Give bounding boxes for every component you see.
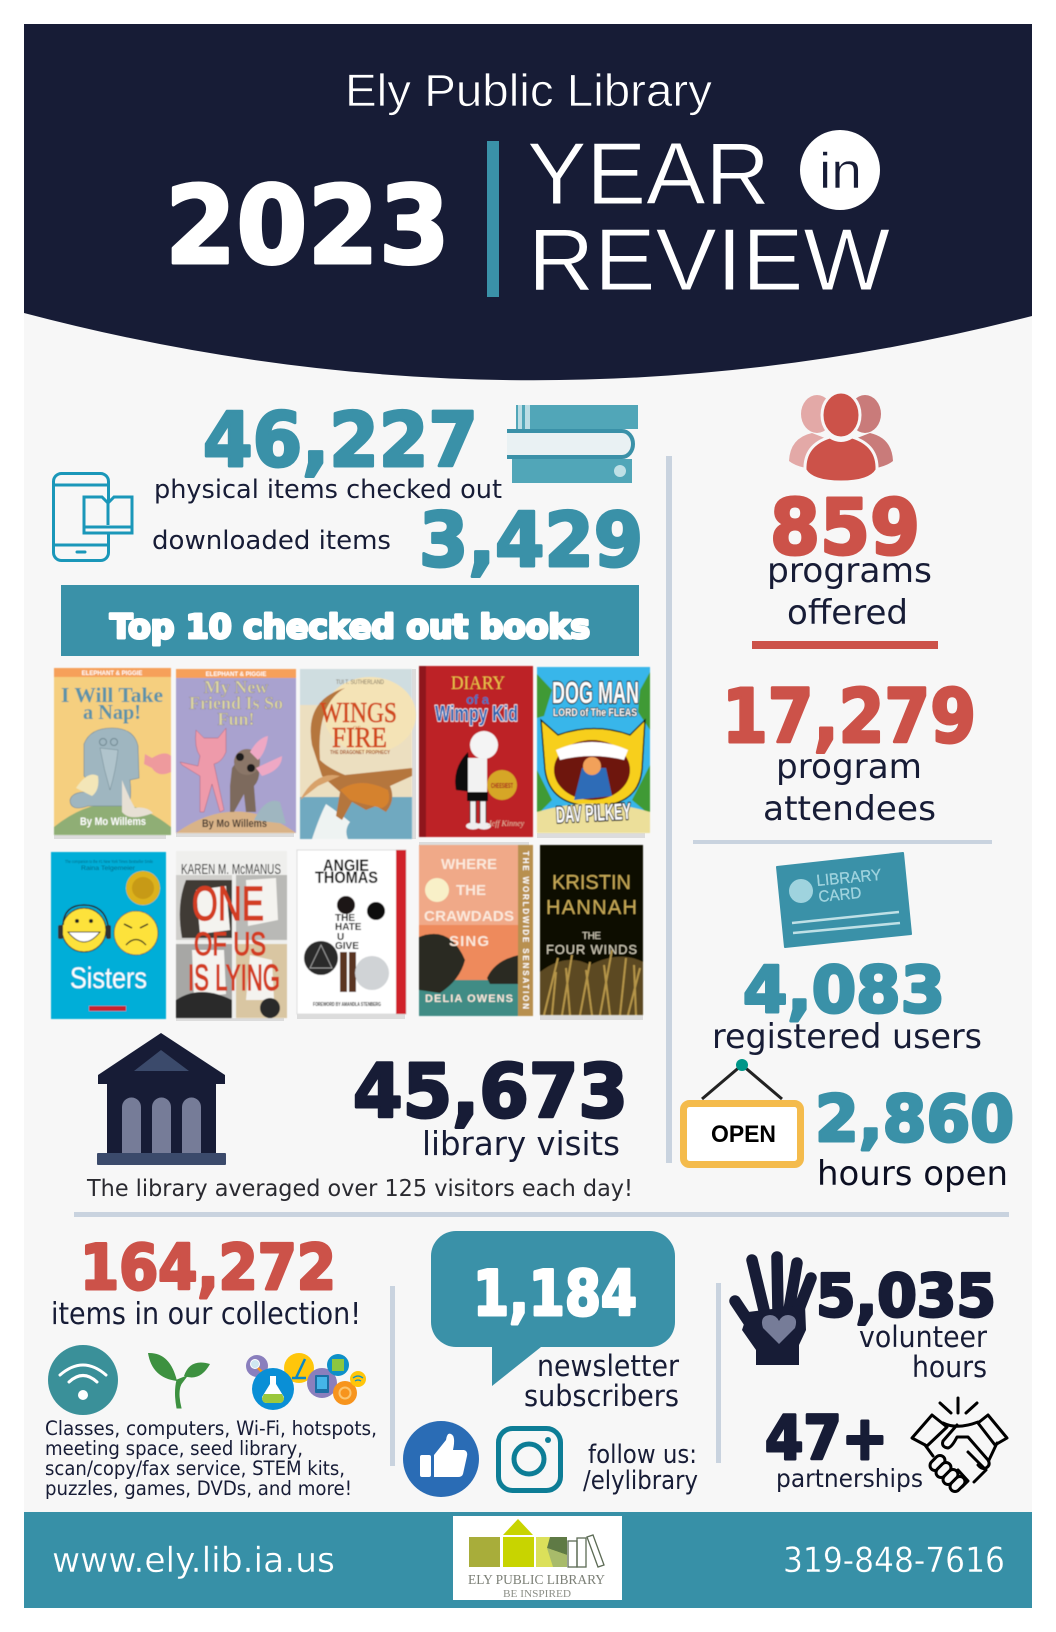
book cover: Where the Crawdads Sing: CRAWDADS [424,908,514,925]
library name: Ely Public Library [345,65,713,116]
book cover: Sisters: Raina Telgemeier [81,866,135,872]
callout: newsletter speech bubble [431,1231,675,1386]
stat: items in collection [51,1231,361,1332]
icon: open sign [684,1059,800,1164]
book cover: The Hate U Give: GIVE [335,941,359,952]
book cover: Sisters [51,852,166,1019]
book cover: The Four Winds: HANNAH [546,897,637,919]
stat: registered users: registered users [712,1017,982,1057]
book cover: I Will Take a Nap [54,668,171,835]
text: daily visitors: The library averaged over 125 visitors each day! [86,1176,633,1202]
icon: open sign: OPEN [711,1121,776,1148]
logo: Ely Public Library: ELY PUBLIC LIBRARY [468,1573,605,1588]
panel: footer band [24,1512,1032,1608]
stat: volunteer hours: hours [912,1350,987,1384]
text: phone number: 319-848-7616 [783,1541,1005,1581]
text: newsletter subscribers: subscribers [524,1379,679,1413]
stat: registered users [712,954,982,1057]
book cover: My New Friend Is So Fun: By Mo Willems [202,818,267,830]
stat: partnerships [765,1403,923,1493]
stat: program attendees: attendees [763,789,936,829]
book cover: The Hate U Give: ANGIE [323,856,369,875]
book cover: The Four Winds [540,845,643,1015]
divider: horizontal section rule [74,1212,1009,1217]
book cover: Diary of a Wimpy Kid: of a [466,692,490,707]
icon: stack of books [507,405,638,483]
accent bar [487,141,499,297]
stat: items in collection: 164,272 [80,1231,336,1304]
divider: red rule [752,641,938,649]
REVIEW heading: REVIEW [528,210,890,309]
icon: handshake [912,1398,1007,1494]
icon: instagram [498,1428,560,1490]
text: services list: Classes, computers, Wi-Fi, hotspots, [45,1417,377,1440]
text: services list: meeting space, seed library, [45,1437,303,1460]
book cover: Sisters: The companion to the #1 New York Times Bestseller Smile [65,859,153,864]
logo: Ely Public Library: BE INSPIRED [503,1588,571,1600]
stat: library visits: library visits [422,1124,620,1163]
book cover: One of Us Is Lying: OF US [194,926,266,962]
stat: hours open: 2,860 [815,1083,1014,1157]
banner: top 10 heading [61,585,639,656]
book cover: Wings of Fire: WINGS [320,698,397,729]
book cover: One of Us Is Lying: IS LYING [188,957,280,998]
stat: downloaded items [152,496,643,584]
book cover: Diary of a Wimpy Kid: Wimpy Kid [435,701,518,726]
book cover: My New Friend Is So Fun: ELEPHANT & PIGGIE [206,672,266,678]
book cover: Dog Man Lord of the Fleas: DAV PILKEY [555,798,632,828]
icon: phone with e-book [54,474,132,560]
logo: Ely Public Library [453,1516,622,1600]
stat: items in collection: items in our collection! [51,1297,361,1332]
book cover: I Will Take a Nap: a Nap! [83,700,141,724]
text: follow us: /elylibrary [583,1466,698,1496]
book cover: Dog Man Lord of the Fleas: LORD of The FLEAS [553,707,637,719]
callout: newsletter speech bubble: 1,184 [473,1257,637,1330]
stat: volunteer hours [816,1261,996,1384]
book cover: Wings of Fire: TUI T. SUTHERLAND [336,680,385,686]
book cover: My New Friend Is So Fun: My New [204,677,268,697]
book cover: Wings of Fire: OF [353,726,361,732]
book cover: Wings of Fire: FIRE [332,723,387,754]
stat: programs offered [767,484,932,633]
book cover: One of Us Is Lying [176,851,287,1018]
book cover: Where the Crawdads Sing: WHERE [441,856,497,873]
stat: physical items checked out: physical items checked out [154,475,502,505]
book cover: I Will Take a Nap: ELEPHANT & PIGGIE [82,671,142,677]
text: newsletter subscribers: newsletter [537,1349,679,1383]
book cover: The Four Winds: THE [582,931,601,942]
stat: downloaded items: 3,429 [419,496,643,584]
stat: downloaded items: downloaded items [152,526,391,556]
stat: programs offered: programs [767,551,932,591]
text: follow us: follow us: [588,1440,697,1470]
YEAR heading: YEAR [527,124,770,223]
stat: library visits: 45,673 [353,1049,628,1135]
icon: seedling [148,1353,210,1408]
book cover: Diary of a Wimpy Kid: DIARY [451,673,505,694]
stat: partnerships: partnerships [776,1464,923,1493]
book cover: I Will Take a Nap: By Mo Willems [80,816,146,828]
book cover: One of Us Is Lying: ONE [192,878,264,931]
book cover: My New Friend Is So Fun: Fun! [217,709,255,729]
book cover: The Hate U Give: THE [335,913,355,924]
icon: wifi [48,1345,118,1415]
book cover: The Hate U Give: THOMAS [315,868,378,887]
stat: program attendees: 17,279 [722,674,976,760]
book cover: The Hate U Give: HATE [335,922,362,933]
book cover: Diary of a Wimpy Kid [419,666,533,837]
banner: top 10 heading: Top 10 checked out books [110,607,590,646]
stat: physical items checked out: 46,227 [203,396,478,484]
panel: header [24,24,1032,380]
in badge [800,130,880,210]
text: follow us [583,1440,698,1496]
book cover: One of Us Is Lying: KAREN M. McMANUS [181,861,281,878]
icon: library card [777,853,911,947]
book cover: I Will Take a Nap: I Will Take [61,683,163,707]
book cover: Dog Man Lord of the Fleas: DOG MAN [552,675,639,710]
book cover: The Hate U Give [297,850,406,1014]
stat: volunteer hours: 5,035 [816,1261,996,1330]
text: services list: puzzles, games, DVDs, and more! [45,1477,352,1500]
in badge: in [819,143,862,199]
book cover: Sisters: Sisters [70,962,147,995]
book cover: My New Friend Is So Fun [176,669,296,833]
book cover: Where the Crawdads Sing: THE [456,882,486,899]
book cover: Where the Crawdads Sing [419,845,533,1016]
stat: registered users: 4,083 [743,954,945,1028]
book cover: Wings of Fire: THE DRAGONET PROPHECY [330,750,391,756]
book cover: My New Friend Is So Fun: Friend Is So [189,693,283,713]
stat: physical items checked out [154,396,502,505]
stat: partnerships: 47+ [765,1403,888,1474]
book cover: Dog Man Lord of the Fleas [537,667,650,833]
book cover: Where the Crawdads Sing: DELIA OWENS [425,993,513,1005]
book cover: The Hate U Give: U [337,932,344,943]
stat: program attendees [722,674,976,829]
year: 2023 [165,164,450,289]
divider: right column rule [693,840,992,844]
stat: hours open [815,1083,1014,1194]
book cover: Diary of a Wimpy Kid: Jeff Kinney [488,819,525,828]
icon: library building [97,1033,226,1165]
book cover: Where the Crawdads Sing: SING [449,933,489,950]
book cover: The Hate U Give: FOREWORD BY AMANDLA STENBERG [313,1002,381,1008]
text: website: www.ely.lib.ia.us [52,1541,335,1581]
stat: volunteer hours: volunteer [859,1320,987,1354]
book shadows [54,669,645,1021]
stat: programs offered: 859 [770,484,920,573]
icon: facebook thumbs up [403,1421,479,1497]
text: services list [45,1417,377,1500]
icon: STEM cluster [246,1353,366,1410]
stat: programs offered: offered [787,593,908,633]
stat: program attendees: program [776,747,922,787]
divider: bottom left [390,1286,395,1466]
text: services list: scan/copy/fax service, STEM kits, [45,1457,345,1480]
icon: library card: CARD [818,885,862,906]
book cover: Diary of a Wimpy Kid: CHEESIEST [491,783,513,790]
icon: people [789,392,893,482]
divider: vertical main [666,456,672,1163]
text: newsletter subscribers [524,1349,679,1413]
stat: hours open: hours open [817,1154,1008,1194]
icon: volunteer hand [735,1257,811,1365]
book cover: The Four Winds: KRISTIN [552,872,631,894]
icon: library card: LIBRARY [816,867,882,890]
book cover: Where the Crawdads Sing: THE WORLDWIDE SENSATION [521,851,530,1009]
book cover: Wings of Fire [300,669,416,839]
book cover: The Four Winds: FOUR WINDS [546,942,637,957]
divider: bottom right [716,1283,721,1463]
